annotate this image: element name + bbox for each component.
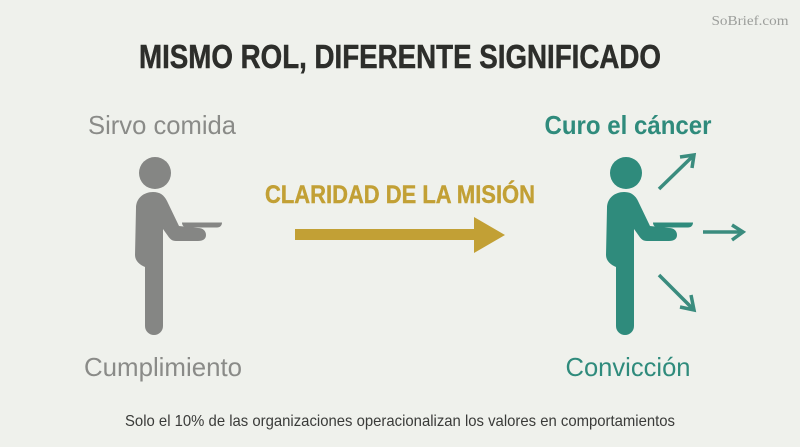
icon: grey waiter figure (135, 157, 222, 335)
label: Claridad de la misión: CLARIDAD DE LA MISIÓN (265, 179, 535, 209)
arrow: gold transition arrow (295, 217, 505, 253)
icon: teal waiter figure (606, 157, 693, 335)
label: Curo el cáncer: Curo el cáncer (544, 110, 712, 140)
icon: downward impact arrow (659, 275, 694, 310)
label: Cumplimiento: Cumplimiento (84, 352, 242, 382)
icon: upward impact arrow (659, 155, 694, 189)
label: Convicción: Convicción (566, 352, 690, 382)
footnote: Solo el 10% de las organizaciones operacionalizan los valores en comportamientos (125, 413, 675, 430)
label: Sirvo comida: Sirvo comida (88, 110, 237, 140)
watermark: SoBrief.com (712, 14, 789, 29)
icon: forward impact arrow (703, 225, 743, 240)
title: MISMO ROL, DIFERENTE SIGNIFICADO (139, 38, 661, 75)
